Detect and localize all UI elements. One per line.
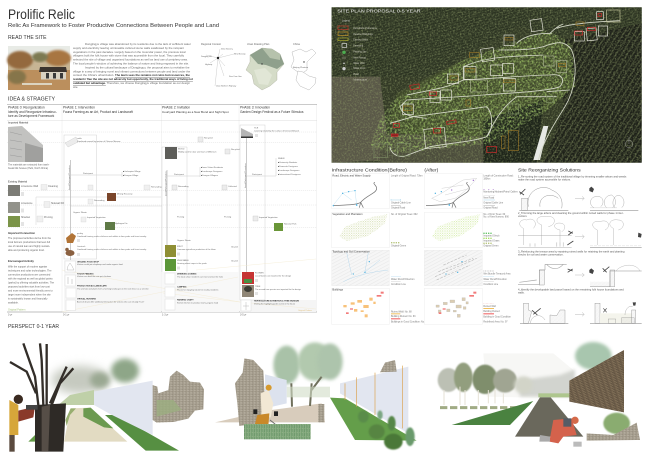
encouraged activity text: and more environmental friendly ones to [8, 290, 53, 292]
hazy trees [273, 342, 332, 407]
phase 1 activities: Art-tech draws offer additional interaction for visitors who can virtually "hunt" [77, 300, 144, 304]
solution 3 [518, 250, 642, 287]
white wall [94, 381, 153, 435]
phase 2 header [162, 106, 229, 114]
map legend: New Paving [353, 57, 366, 59]
before map: buildings: Buildings [332, 288, 344, 292]
worker with chainsaw [9, 395, 38, 452]
worker trimming [253, 385, 282, 430]
before legend: buildings: Building Ruined: No. 63 [391, 316, 416, 318]
phase 3 items: TILE [254, 128, 259, 130]
phase 2 activities: FARMING CRAFT [177, 298, 194, 302]
phase 1 items: Livestock [77, 245, 85, 248]
before map: vegetation [332, 212, 389, 248]
perspective: scene 2 stone ruin and worker [215, 342, 332, 439]
stone ruin [153, 371, 204, 423]
phase 2 items: ■Inner Urban Residents [201, 166, 223, 169]
phase 1 activities: PRODUCTION AS LANDSCAPE [77, 284, 107, 288]
phase 2 items: ■Danguo Villagers [201, 174, 218, 177]
phase 1 items: Combined manual by section of Chinese Minnow [77, 140, 121, 143]
map: jinan drawing plan: Jinan Drawing Plan [247, 42, 270, 46]
worker red [539, 417, 582, 447]
after legend: topology [483, 271, 511, 286]
after legend: buildings: Building Ruined [483, 311, 500, 313]
phase 1 items: Mining Recovery [117, 192, 133, 196]
panel: infrastructure condition [332, 168, 518, 324]
map legend: Legend [342, 20, 350, 22]
after legend: topology: Condition Line [483, 283, 499, 286]
tree behind wall [575, 342, 612, 370]
existing material column [8, 180, 65, 227]
stone stub [318, 404, 324, 422]
solution 1: make the road system accessible for visitors. [518, 177, 571, 181]
imported material column: The materials are extracted from trash- [8, 164, 50, 166]
encouraged activity text: (parks) by offering valuable activities. The [8, 282, 55, 284]
existing material column: Sidewall Fill [51, 202, 65, 205]
hazy hills [483, 353, 575, 398]
solution 2: vention. [518, 214, 528, 218]
phase 1 items: Reinvading [94, 200, 105, 202]
timeline connectors: Participant [252, 173, 262, 176]
green bed [330, 398, 417, 441]
map: regional context [201, 42, 246, 88]
encouraged activity text: is sustainably known and financially [8, 298, 48, 300]
after legend: vegetation [483, 213, 510, 248]
timeline connectors [36, 125, 316, 312]
map: regional context: Xiao Yuan Gou [229, 76, 242, 78]
phase 2 items: WOOD [178, 148, 185, 150]
text block: site description: residents' flee the site are not adversity but opportunity, the traditional ways of living not [73, 77, 193, 81]
solution 4: 4_Identify the developable land parcel based on the remaining folk house foundations and [518, 288, 624, 292]
phase 2 activities: Places for enjoying nature for nearby residents [177, 288, 218, 292]
phase 2 items [165, 137, 240, 271]
timeline labels: 0 yr [8, 314, 12, 316]
phase 1 activities: The animals and plants form a farming landscape on the rock fence as a scheme [77, 288, 149, 290]
text block: site description: selected the site of village and organized foundations as well as land use of periphery area. [73, 58, 188, 62]
phase 1 items: ■Danguo Village [123, 174, 139, 177]
phase 1 items: Imported Vegetation [87, 216, 106, 219]
existing material column: Limestone Wall [21, 185, 38, 188]
imported material column: Imported Material [8, 120, 29, 124]
encouraged activity text: with the regional as well as global points [8, 278, 53, 280]
encouraged activity text [8, 259, 55, 312]
phase 0 header [8, 106, 57, 118]
text block: site description: outdated but advantage. Therefore, we choose Dongjingyu village foundation as our design [73, 81, 190, 85]
phase 2 header: PHASE 2: Invitation [162, 106, 190, 110]
phase 2 items: Widely used for door and foam of Millenium [178, 152, 217, 154]
phase 1 items: poultry [77, 232, 83, 235]
phase 2 activities: The local urban residents can host and eat the fruits [177, 276, 223, 278]
after legend: vegetation: No. of Fruit Trees: 60 [483, 213, 506, 216]
map: regional context: Wind Nursery [234, 52, 246, 56]
before map: topology: Topology and Soil Conservation [332, 250, 370, 254]
phase 1 activities: ORGANIC FOOD SHOP [77, 260, 100, 264]
phase 1 items: Combined farming scales chickens and rabbits in lime yards and forest nearby [77, 235, 146, 238]
stone pile [587, 423, 640, 441]
phase 0 header: Identify and Reorganize Infrastruc- [8, 110, 57, 114]
timeline connectors: Participant [83, 172, 93, 175]
map legend [338, 20, 378, 81]
ground [215, 403, 325, 422]
encouraged activity text: proposed activities start from low-cost [8, 286, 50, 288]
encouraged activity text: Encouraged Activity [8, 259, 34, 263]
perspective: scene 3 planting bed [317, 343, 417, 450]
phase 3 items: FLOWER [255, 272, 264, 274]
existing material column: Pruning [44, 216, 53, 219]
imported connection text: Imported Connection [8, 231, 35, 235]
after map: vegetation [424, 212, 482, 248]
map: regional context: Inline Nursery [221, 48, 233, 50]
phase 2 items: Collected [228, 185, 238, 188]
before legend: buildings: Ruined Wall: No. 68 [391, 311, 412, 313]
before legend: roads: Original Cable Line [391, 202, 412, 205]
map: jinan drawing plan [246, 42, 284, 90]
text block: site description: vegetations in the past decades. Largely based on the muscular power, the previous local [73, 50, 186, 54]
text block: site description: villagers built the folk house with stone that was accessible from the local. They carefully [73, 54, 185, 58]
title on site plan: SITE PLAN PROPOSAL 0-5 YEAR [337, 9, 422, 14]
phase 2 activities: CAMPING [177, 286, 187, 288]
before legend: topology: Condition Line [391, 283, 407, 286]
encouraged activity text: Original Pattern [8, 308, 26, 312]
phase 2 items: Pruning [177, 216, 185, 218]
phase 3 items: Covering related by the surface of Densed hillsand [254, 130, 299, 132]
map: regional context: Jinan Northern Highway [216, 84, 236, 88]
text block: site description: supply and electricity leaving unmissable cultured stone walls swallowed by the rampant [73, 46, 184, 50]
text block: site description: The local people's wisdom of achieving the balance of nature and living engraved in the site. [73, 62, 189, 66]
after legend: topology: Water Runoff Direction [483, 278, 507, 281]
after legend: vegetation: No. of New Nursery: 890 [483, 216, 510, 219]
map: regional context: Highway [205, 64, 212, 66]
phase 1 items: Hydrogen Fix [115, 222, 128, 225]
phase 3 items: The nursed tree species are imported for the design [255, 288, 301, 291]
after legend: roads: Length of Constructive Road: [483, 174, 514, 177]
before legend: buildings [391, 311, 429, 323]
solution 3: 3_Reinforcing the terrace area by repairing ruined walls for retaining the earth and planting [518, 250, 625, 254]
phase 2 items: Growing wheat crops in the yards [177, 262, 207, 265]
map legend: Retained Buildings [353, 33, 374, 36]
phase 1 activities: TOUCH FEEDING [77, 274, 94, 276]
retained orange marks [403, 22, 584, 151]
before legend: roads [391, 174, 423, 210]
map: regional context: Regional Context [201, 42, 221, 46]
phase 2 items: Grazed [231, 246, 239, 248]
map legend: Existing Walls [353, 39, 369, 42]
phase 3 items: ■International Designers [278, 173, 301, 176]
phase 3 items: Imported Vegetation [259, 216, 278, 219]
encouraged activity text: connection productions are connected [8, 274, 51, 276]
heading after: (After) [424, 168, 439, 174]
phase 2 items: Recycled [231, 149, 240, 151]
grass strip [244, 424, 311, 439]
before map: topology [332, 250, 389, 286]
phase 0 header: PHASE 0: Reorganization [8, 106, 45, 110]
panel: site reorganizing solutions [518, 168, 642, 323]
before legend: roads: Original Road [391, 207, 406, 210]
text block: site description: Dongjingyu village was abandoned by its residents due to the lack of sufficient water [85, 42, 191, 46]
phase 1 header: Fauna Farming as an Art, Product and Landscraft [63, 110, 133, 114]
phase 2 items: Recycled [204, 138, 213, 140]
after legend: buildings: Ruined Wall [483, 306, 496, 308]
after map: buildings [424, 288, 482, 324]
phase 3 header: PHASE 3: Innovation [240, 106, 270, 110]
phase 2 header: Courtyard Planting as a New Bond and Sight Spot [162, 110, 229, 114]
imported connection text: use of natural lean and highly sustain- [8, 245, 50, 248]
phase 2 items: Pruning [224, 216, 232, 218]
solution 4: walls. [518, 291, 525, 295]
phase 2 items: VEGETABLE [177, 259, 189, 262]
heading: read the site: READ THE SITE [8, 35, 47, 41]
phase 2 activities: Kitchen kitchen to produce Jiama-organic food [177, 302, 218, 304]
timeline connectors: Local Participant Promotion [244, 164, 247, 188]
phase 2 activities: DRINKING & DINING [177, 274, 197, 276]
phase 3 items: Local flowers are imported for the design [255, 274, 291, 278]
phase 3 items: WHEN [278, 158, 285, 160]
text block: site description: Inspired by the cultural landscape of Dongjingyu, the proposal aims to revitalize the [85, 65, 190, 69]
map legend: Water Well [353, 62, 365, 65]
solution 3: shrubs for soil and water conservation. [518, 253, 564, 257]
panel: phase matrix [7, 104, 317, 316]
map: china: Beijing Plantain [293, 66, 309, 69]
encouraged activity text: With the support of modern agarian [8, 266, 48, 268]
phase 1 items: Reinvading [151, 186, 162, 188]
after legend: buildings: Building in Good Condition [483, 315, 512, 318]
after map: roads [424, 174, 482, 209]
road network [390, 21, 620, 160]
perspective: scene 1 tree and wall [9, 343, 204, 452]
after legend: roads: 180km [483, 178, 490, 180]
before map: roads: Road, Electric and Water Supply [332, 174, 371, 178]
before legend: vegetation [391, 213, 418, 247]
heading: Site Reorganizing Solutions [518, 168, 581, 174]
before map: buildings [332, 288, 389, 324]
phase 2 items: Organic Waste [177, 239, 192, 242]
phase 2 items: ■Landscape Designers [201, 170, 222, 173]
after legend: roads: Original Cable Line [483, 202, 504, 205]
existing material column: Existing Material [8, 180, 27, 184]
phase 1 activities: Visitors could join shopkeep and make organic food [77, 263, 123, 266]
existing material column: Cleaning [48, 185, 58, 188]
heading before: Infrastructure Condition(Before) [332, 168, 407, 174]
after legend: roads: Original Road [483, 207, 498, 210]
before legend: vegetation: Original Green [391, 244, 407, 247]
map legend: Demolished Structures [353, 27, 378, 30]
flowering shrub [603, 413, 630, 434]
grass bed [452, 401, 533, 425]
encouraged activity text: techniques and solar technologies. The [8, 270, 52, 272]
phase 3 header [240, 106, 304, 114]
phase 1 activities [65, 260, 149, 310]
before map: vegetation: Vegetation and Plantation [332, 212, 363, 216]
phase 1 items: ■Jucheqiao Village [123, 170, 141, 173]
phase 1 items: Organic Waste [73, 211, 88, 214]
phase 3 items: ■Landscape Designers [278, 169, 299, 172]
text block: site description: site. [73, 85, 78, 89]
text block: site description: village in a way of bringing novel and vibrant connections between people and land under the [73, 69, 191, 73]
phase 3 header: Garden Design Festival as a Future Stimulus [240, 110, 304, 114]
after legend: vegetation: Imported Shrub [483, 235, 500, 238]
after legend: buildings: Redefined Area: No. 97 [483, 320, 508, 323]
after legend: vegetation: Original Green [483, 245, 499, 248]
solution 1: 1_Re-sorting the road system of the traditional village by trimming smaller arbors and weeds [518, 174, 627, 178]
before legend: buildings: Buildings in Good Condition: No. 35 [391, 320, 429, 323]
timeline connectors: Participant [174, 173, 184, 176]
drainage trench [515, 397, 583, 437]
before legend: vegetation: No. of Original Trees: 692 [391, 213, 418, 216]
building outlines [374, 10, 620, 157]
phase 3 items: HORTICULTURE EXHIBITION & TREE MUSEUM [254, 300, 299, 302]
after map: topology [424, 250, 482, 286]
north arrow [625, 137, 633, 148]
solution 2 [518, 211, 642, 248]
map legend: Water Pool [353, 67, 365, 70]
tree grove [438, 363, 533, 408]
imported connection text: able and producing organic food. [8, 249, 45, 252]
phase 1 header [63, 106, 133, 114]
before map: roads [332, 174, 389, 209]
hazy trees [317, 343, 343, 380]
after legend: vegetation: Imported Grass [483, 240, 500, 243]
phase 3 items: ■University Students [278, 161, 297, 164]
perspective: scene 4 trench and stone wall [438, 342, 640, 447]
timeline labels [8, 314, 247, 316]
imported connection text [8, 231, 52, 252]
existing material column: Shadow [21, 216, 30, 219]
timeline labels: 1-3 yr [162, 314, 169, 316]
dead tree [10, 343, 73, 452]
before legend: topology [391, 277, 415, 286]
phase 1 activities: VIRTUAL HUNTERS [77, 298, 97, 300]
map legend: Farmland [353, 45, 364, 48]
before legend: roads: Length of Original Road: 73km [391, 174, 423, 177]
subtitle: Relic As Framework to Foster Productive Connections Between People and Land [8, 23, 219, 29]
background trees [52, 359, 139, 405]
shrubs [358, 410, 415, 450]
encouraged activity text: target more independent when the site [8, 294, 51, 296]
phase 2 items: Reinvading [178, 186, 189, 188]
phase 0 header: ture as Development Framework [8, 114, 55, 118]
heading: perspect: PERSPECT 0-1 YEAR [8, 324, 59, 330]
orange poles [345, 366, 403, 428]
phase 3 items: Visiting the highlight garden event in the future [254, 302, 296, 306]
after legend: roads: Monitoring/Hydrant/Patrol Cables [483, 191, 518, 194]
heading: idea and strategy: IDEA & STRAGETY [8, 96, 56, 102]
imported material column [8, 120, 50, 170]
timeline connectors: Local Participant Promotion [68, 166, 71, 190]
white wall [340, 367, 408, 433]
phase 2 items: FRUIT [177, 246, 184, 248]
demolished red marks [391, 13, 601, 152]
solution 1 [518, 174, 638, 210]
solution 2: 2_Trimming the large arbors and cleaning the ground within ruined walls for phase 1 inter- [518, 211, 624, 215]
map legend: Infrastructure [353, 78, 368, 81]
text block: site description [73, 42, 193, 89]
timeline labels: 3-5 yr [240, 314, 247, 316]
text block: site description: context the China's urbanization. The learn sees the remains not ruins but resources, the [73, 73, 190, 77]
aerial terrain [332, 7, 642, 163]
panel: site plan [332, 7, 642, 163]
ground path and planting [28, 408, 179, 451]
phase 3 items [241, 128, 312, 312]
phase 3 items: ■Domestic Designers [278, 165, 298, 168]
ruin top [380, 360, 397, 372]
phase 2 items: Grazed [231, 260, 239, 262]
phase 3 items: National Park [284, 222, 297, 226]
timeline connectors: Local Participant Promotion [164, 172, 168, 196]
photo: old village house [7, 46, 71, 90]
after legend: topology: Wet Bundle Terraced Area [483, 272, 511, 275]
map: china [291, 42, 316, 90]
before legend: topology: Water Runoff Direction [391, 278, 415, 281]
stone wall [569, 350, 624, 412]
phase 1 activities: Visitors can feed the cute pet chickens [77, 275, 111, 278]
map: regional context: Dongjing Vill. [201, 56, 212, 58]
after legend: roads: New Road [483, 197, 495, 199]
title: Prolific Relic [8, 7, 75, 22]
phase 1 items: Combined farming scales chickens and rabbits in lime yards and forest nearby [77, 248, 146, 251]
after legend: buildings [483, 304, 512, 323]
solution 4 [518, 288, 642, 323]
imported connection text: local farmers productions that lean full [8, 241, 51, 244]
map legend: Planting Site [353, 51, 367, 54]
white wall [265, 374, 287, 408]
phase 3 items: TREE [255, 286, 261, 288]
timeline labels: 0-1 yr [63, 314, 70, 316]
encouraged activity text: available. [8, 302, 19, 304]
phase 2 activities [165, 273, 223, 310]
stone wall [235, 358, 265, 426]
map legend: Road [353, 74, 360, 76]
phase 1 items: cattle [77, 137, 83, 140]
phase 3 items: Original Pattern [298, 309, 312, 312]
phase 1 items [65, 137, 162, 256]
imported connection text: The proposed activities derive from the [8, 237, 52, 240]
map: china: China [293, 42, 300, 46]
phase 1 header: PHASE 1: Intervention [63, 106, 95, 110]
after legend: roads [483, 174, 518, 210]
phase 2 items: Common agriculture production of the Huan [177, 248, 216, 251]
imported material column: break folk houses (Hebi, North China) [8, 167, 48, 170]
existing material column: Limestone [21, 202, 33, 205]
